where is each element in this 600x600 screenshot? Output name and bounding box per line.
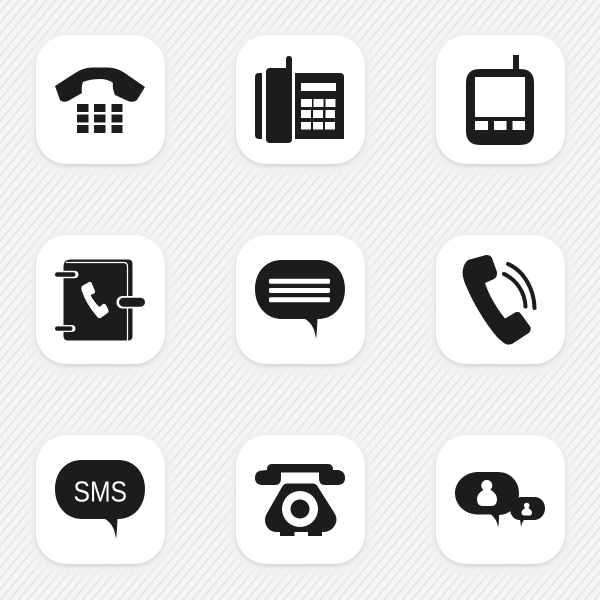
- icon: SMS bubble: [55, 460, 145, 539]
- text lines: [269, 279, 330, 302]
- signal waves: [504, 264, 534, 308]
- large bubble: [455, 472, 519, 528]
- SMS text: SMS: [74, 476, 127, 508]
- card: [436, 235, 565, 364]
- card: [236, 235, 365, 364]
- phone glyph: [81, 282, 109, 318]
- icon: speech bubble with lines: [255, 260, 345, 339]
- panel: handset over keypad: [30, 31, 171, 175]
- icon: mobile handset: [466, 55, 534, 145]
- card: [36, 35, 165, 164]
- panel: ringing receiver: [430, 231, 571, 375]
- card halo: [30, 231, 171, 375]
- panel: user chat bubbles: [430, 431, 571, 575]
- page edge: [66, 262, 128, 340]
- small person: [522, 503, 532, 516]
- card halo: [430, 231, 571, 375]
- left ring tabs: [55, 271, 78, 332]
- card: [236, 435, 365, 564]
- card: [236, 35, 365, 164]
- clasp: [116, 296, 146, 308]
- card: [36, 435, 165, 564]
- icon: user chat bubbles: [455, 472, 545, 528]
- card: [436, 35, 565, 164]
- icon: ringing receiver: [462, 255, 534, 345]
- panel: phone book: [30, 231, 171, 375]
- receiver: [462, 255, 531, 345]
- large person: [477, 480, 497, 506]
- panel: SMS bubble: [30, 431, 171, 575]
- icon: rotary phone: [255, 464, 345, 536]
- panel: mobile handset: [430, 31, 571, 175]
- card halo: [30, 431, 171, 575]
- card halo: [230, 431, 371, 575]
- icon: handset and keypad: [55, 68, 145, 133]
- icon: phone book: [55, 260, 146, 340]
- card: [436, 435, 565, 564]
- panel: message bubble: [230, 231, 371, 375]
- card halo: [430, 431, 571, 575]
- bubble: [55, 460, 145, 539]
- bubble: [255, 260, 345, 339]
- small bubble: [510, 497, 545, 528]
- card halo: [230, 31, 371, 175]
- card: [36, 235, 165, 364]
- panel: desk phone: [230, 31, 371, 175]
- card halo: [30, 31, 171, 175]
- icon: desk phone: [255, 56, 344, 143]
- panel: rotary phone: [230, 431, 371, 575]
- card halo: [230, 231, 371, 375]
- card halo: [430, 31, 571, 175]
- book cover: [64, 260, 132, 340]
